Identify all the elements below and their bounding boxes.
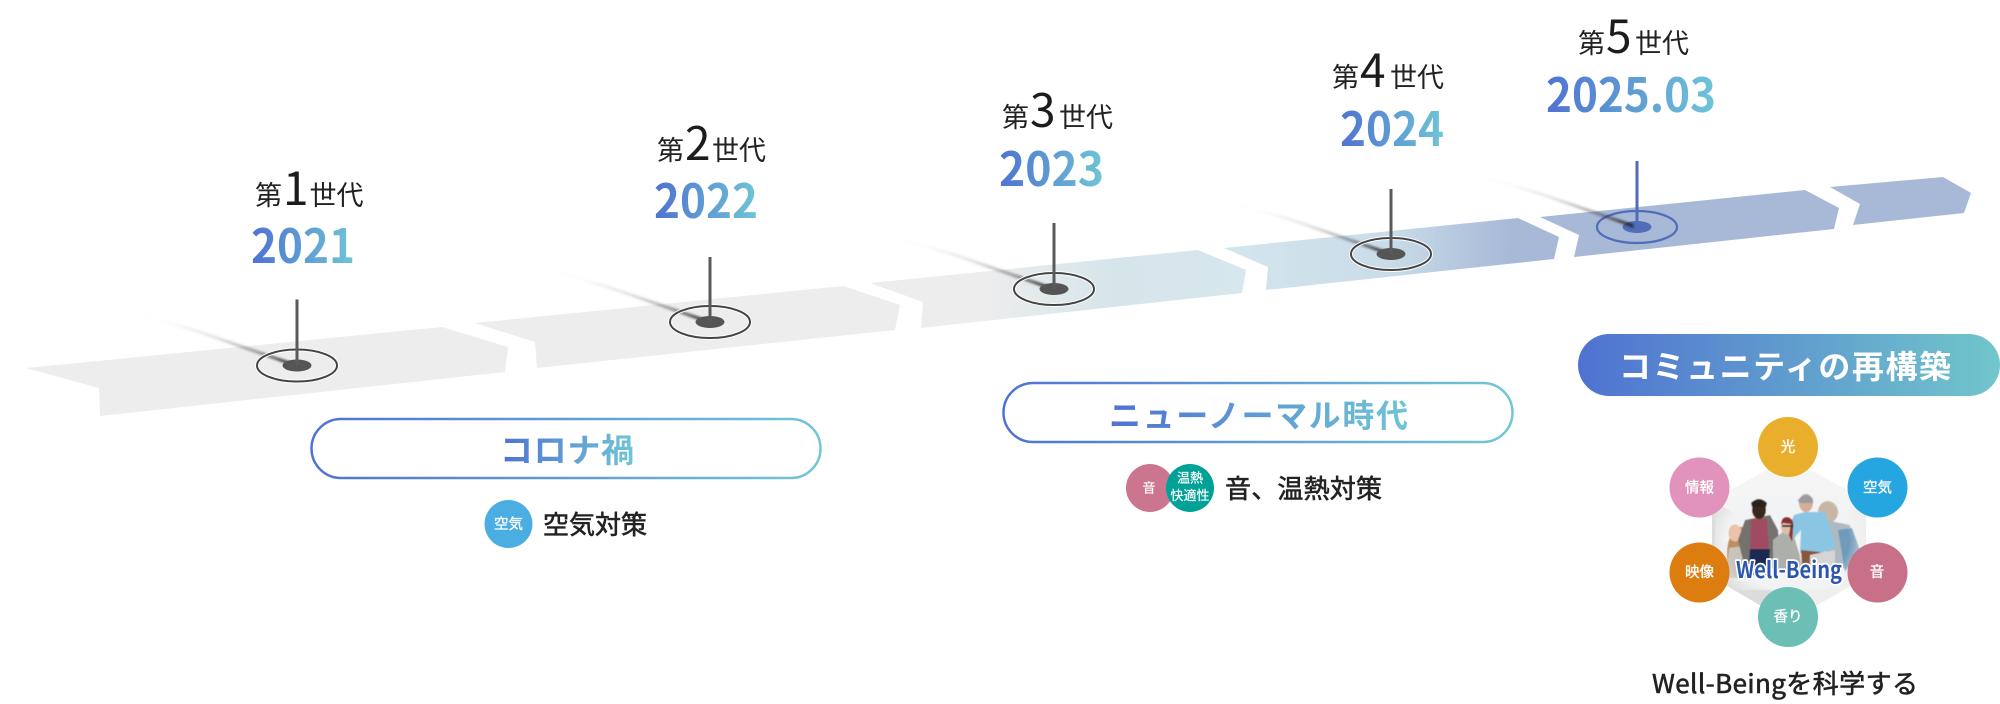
well-being diagram	[1670, 417, 1908, 647]
pin: generation 4	[1220, 189, 1431, 270]
road segment 4	[1224, 218, 1559, 290]
year 2022: 2022	[654, 163, 758, 232]
generation 2 label: 2	[685, 108, 711, 174]
year 2025.03: 2025.03	[1546, 57, 1716, 126]
generation 1 label: 1	[283, 153, 309, 219]
road segment 3	[870, 250, 1246, 328]
standing man	[1738, 515, 1781, 568]
node: air	[1848, 458, 1908, 518]
far right person	[1818, 501, 1838, 523]
generation 4 label: 第	[1332, 56, 1359, 95]
road segment 2	[475, 286, 900, 368]
icon: air: 空気	[494, 513, 523, 534]
generation 1 label: 第	[255, 174, 282, 213]
icon: thermal comfort	[1166, 464, 1214, 512]
icon: sound: 音	[1142, 478, 1156, 496]
sound and thermal text: 音、温熱対策	[1225, 469, 1382, 506]
node: air: 空気	[1863, 476, 1892, 498]
node: scent: 香り	[1774, 606, 1802, 626]
timeline road	[26, 177, 1971, 416]
node: information	[1670, 458, 1730, 518]
photo of people	[1715, 494, 1865, 590]
generation 5 label: 世代	[1635, 22, 1689, 61]
node: light	[1758, 417, 1818, 477]
pin: generation 3	[883, 223, 1094, 305]
well-being badge text: Well-Being	[1736, 551, 1842, 585]
pin: generation 2	[539, 257, 750, 338]
generation 3 label: 第	[1002, 96, 1029, 135]
center woman	[1773, 530, 1802, 572]
icon: thermal comfort: 快適性	[1170, 485, 1210, 504]
air measures	[484, 500, 647, 548]
node: video	[1670, 542, 1730, 602]
road segment 1	[26, 327, 508, 416]
generation 4 label: 世代	[1390, 56, 1444, 95]
generation 5 label: 第	[1578, 22, 1605, 61]
year 2023: 2023	[999, 131, 1104, 200]
road segment 6	[1830, 177, 1971, 225]
icon: air	[484, 500, 532, 548]
node: light: 光	[1781, 436, 1795, 457]
generation 5 label: 5	[1606, 1, 1632, 67]
generation 3 label: 世代	[1059, 96, 1113, 135]
air measures text: 空気対策	[543, 505, 647, 542]
pill: new normal era: ニューノーマル時代	[1109, 391, 1408, 437]
node: information: 情報	[1685, 476, 1714, 498]
year 2021: 2021	[251, 208, 355, 277]
node: sound: 音	[1870, 561, 1884, 582]
generation 1 label: 世代	[310, 174, 364, 213]
year 2024: 2024	[1340, 91, 1444, 160]
pill: corona era	[312, 419, 820, 478]
node: video: 映像	[1685, 561, 1714, 582]
road segment 5	[1540, 190, 1839, 257]
pill: new normal era	[1004, 383, 1512, 442]
generation 3 label: 3	[1030, 75, 1056, 141]
icon: thermal comfort: 温熱	[1177, 468, 1203, 486]
hexagon	[1712, 458, 1866, 622]
generation 2 label: 第	[657, 129, 684, 168]
caption: Well-Beingを科学する	[1652, 664, 1918, 701]
pin: generation 1	[126, 300, 337, 382]
node: scent	[1758, 587, 1818, 647]
right man	[1786, 512, 1836, 553]
table	[1810, 550, 1835, 570]
pill: corona era: コロナ禍	[500, 424, 634, 472]
sound and thermal measures	[1126, 464, 1382, 512]
icon: sound	[1126, 464, 1174, 512]
pill: community rebuilding: コミュニティの再構築	[1619, 342, 1951, 388]
generation 4 label: 4	[1360, 35, 1386, 101]
left woman	[1726, 526, 1743, 563]
pin: generation 5	[1466, 161, 1677, 243]
pill: community rebuilding	[1578, 334, 2000, 396]
node: sound	[1848, 542, 1908, 602]
generation 2 label: 世代	[712, 129, 766, 168]
